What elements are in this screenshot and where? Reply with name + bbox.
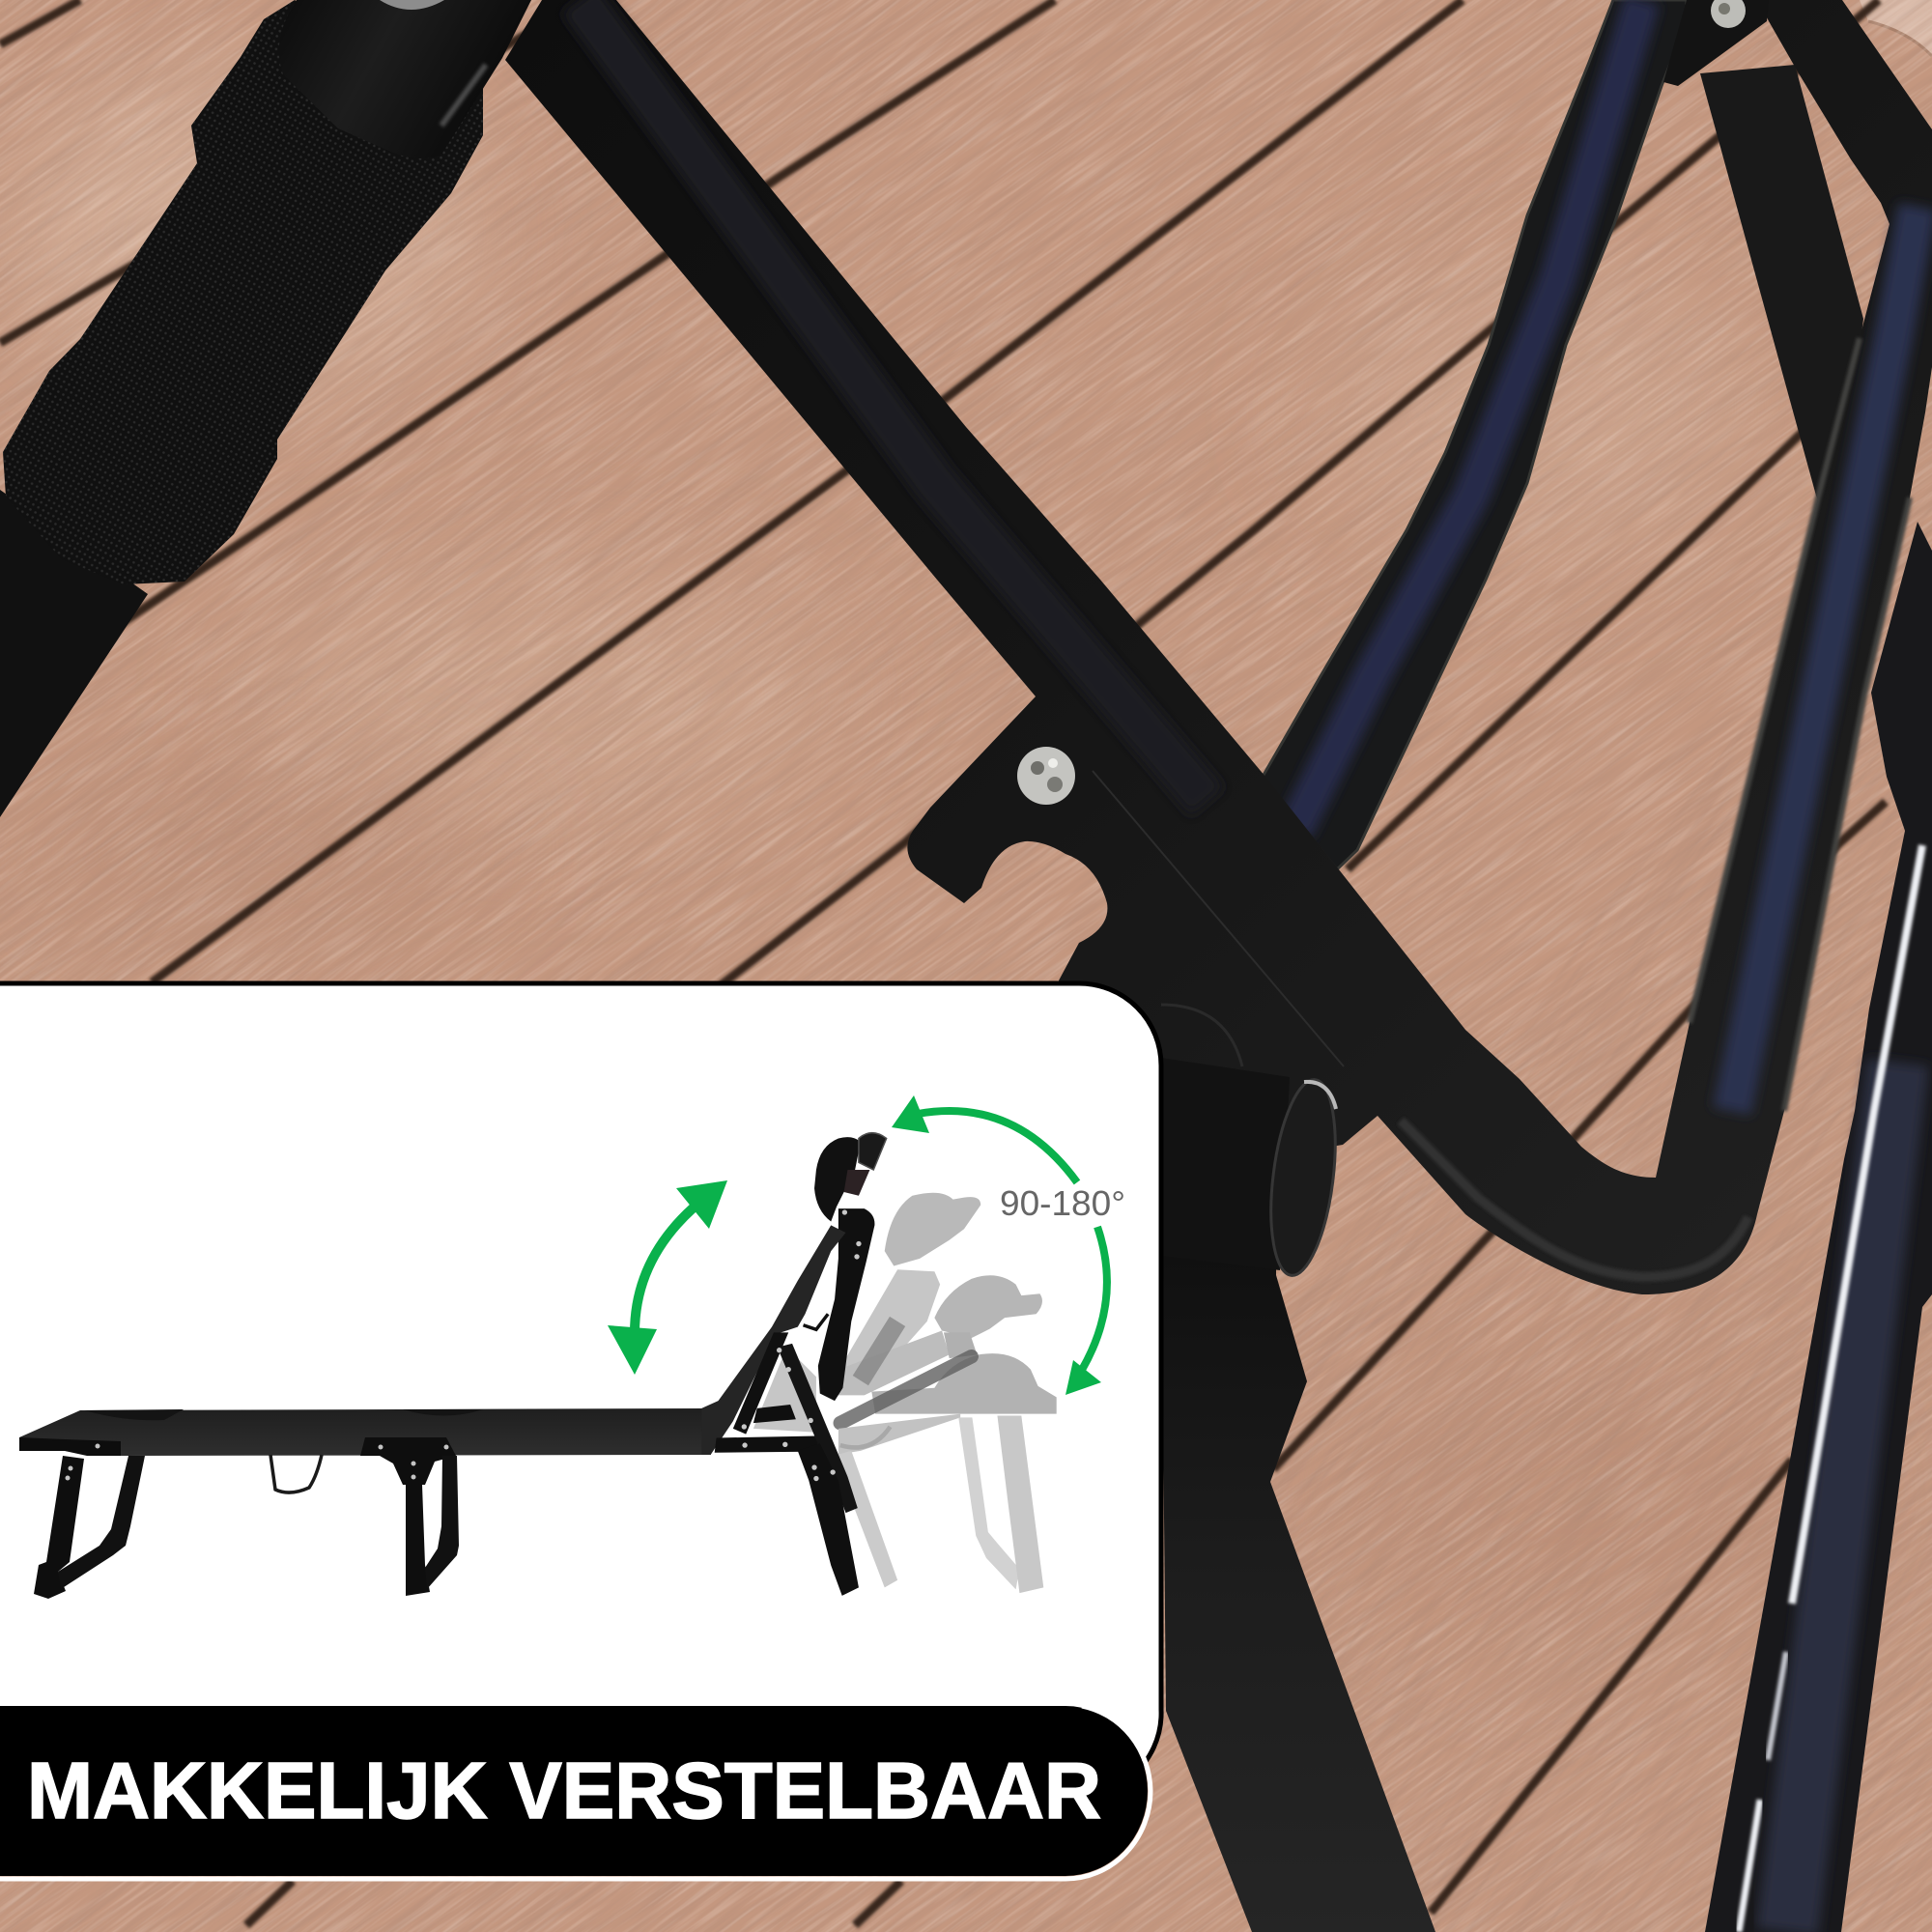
middle leg plate	[360, 1437, 456, 1485]
ghost upright headrest	[885, 1193, 980, 1265]
backrest and A-frame	[701, 1133, 887, 1596]
title banner	[0, 1706, 1151, 1879]
pivot knob	[1161, 1058, 1345, 1279]
rear back bar	[818, 1208, 874, 1401]
A-frame long strut	[778, 1344, 858, 1513]
ghost middle headrest	[934, 1275, 1042, 1338]
lever screw	[1017, 747, 1075, 805]
middle rear leg	[425, 1456, 459, 1589]
strap	[270, 1455, 322, 1492]
lower left tube	[0, 490, 148, 817]
angle label: 90-180°	[1000, 1183, 1125, 1223]
lounger side view	[19, 1133, 887, 1599]
ghost middle backrest	[838, 1330, 950, 1395]
headrest roller	[859, 1133, 887, 1170]
head end rear leg	[58, 1456, 145, 1589]
textured grip	[3, 0, 483, 584]
ghost upright backrest	[838, 1269, 940, 1388]
lower strut	[1161, 1227, 1435, 1932]
main frame bar with armrest and lever	[505, 0, 1932, 1294]
headrest pillow	[814, 1137, 861, 1222]
A-frame base	[715, 1436, 820, 1453]
arrow: lower recline arc	[1065, 1227, 1107, 1395]
ghost lower leg	[838, 1451, 897, 1587]
A-frame hinge gap fill	[753, 1348, 816, 1433]
title text: MAKKELIJK VERSTELBAAR	[27, 1746, 1101, 1835]
rear strut	[1700, 65, 1863, 541]
panel: white inset	[0, 983, 1161, 1787]
ghost dark arm overlay	[840, 1356, 972, 1423]
headrest strap	[844, 1170, 869, 1196]
backrest fabric	[701, 1225, 846, 1455]
arch tube	[1263, 0, 1687, 869]
head end frame	[19, 1437, 121, 1456]
ghost recline positions	[838, 1193, 1057, 1593]
ghost seat front	[838, 1414, 960, 1455]
fabric bed	[19, 1408, 711, 1456]
main rear leg	[798, 1443, 859, 1596]
rear strap	[804, 1314, 828, 1329]
arrow: upper recline arc	[892, 1095, 1077, 1182]
ghost rear leg	[997, 1415, 1043, 1593]
hardware bolts	[742, 1209, 862, 1481]
head end leg	[34, 1456, 84, 1599]
seat cutouts	[84, 1409, 483, 1420]
ghost strap	[840, 1427, 890, 1447]
ghost front leg	[958, 1417, 1019, 1589]
arrow: backrest double arrow	[608, 1180, 727, 1375]
A-frame left diagonal	[733, 1332, 788, 1435]
middle front leg	[406, 1485, 430, 1596]
A-frame cross bar	[753, 1405, 796, 1423]
upper collar tube	[279, 0, 531, 158]
top bracket with screw	[1663, 0, 1769, 86]
long leg tube with silver highlight	[1705, 522, 1932, 1932]
ghost middle plate	[944, 1332, 977, 1358]
left bolts	[66, 1443, 448, 1480]
ghost flat seat	[871, 1353, 1057, 1414]
